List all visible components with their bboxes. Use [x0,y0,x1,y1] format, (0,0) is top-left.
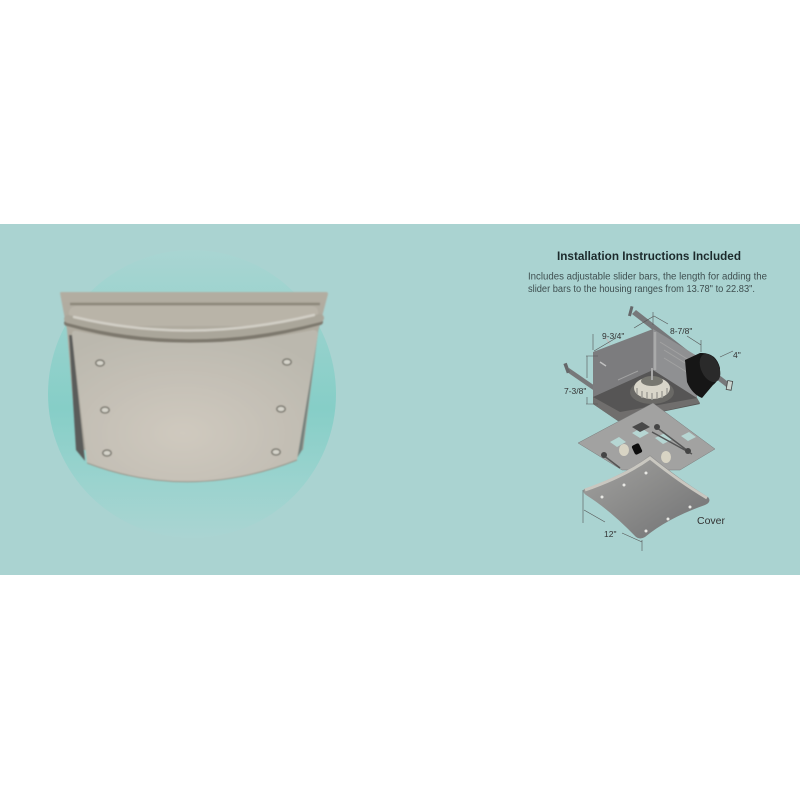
heading: Installation Instructions Included [557,249,741,263]
screws [96,359,291,456]
side shadows [69,335,85,461]
description text: Includes adjustable slider bars, the length for adding the [528,272,767,282]
front face [72,330,318,482]
blower wheel [630,380,674,404]
mounting plate [578,403,715,470]
description text: slider bars to the housing ranges from 13.78" to 22.83". [528,284,755,295]
dimension labels: 12" [604,529,616,539]
description text [528,272,767,295]
duct [685,353,720,398]
dimension labels [564,326,741,539]
curved band [67,322,320,340]
dimension labels: 8-7/8" [670,326,692,336]
dimension labels: 9-3/4" [602,331,624,341]
dimension labels: Cover [697,515,726,527]
background circle [48,250,336,538]
dimension labels: 7-3/8" [564,386,586,396]
dimension lines [583,312,733,551]
teal background band [0,224,800,575]
wiring parts [631,443,643,455]
exploded installation diagram [563,306,741,551]
dimension labels: 4" [733,350,741,360]
product photo: ceiling fan cover [60,292,328,482]
housing box [593,329,653,398]
back plate [60,292,328,450]
cover panel [583,455,709,538]
slider bars [632,310,732,389]
